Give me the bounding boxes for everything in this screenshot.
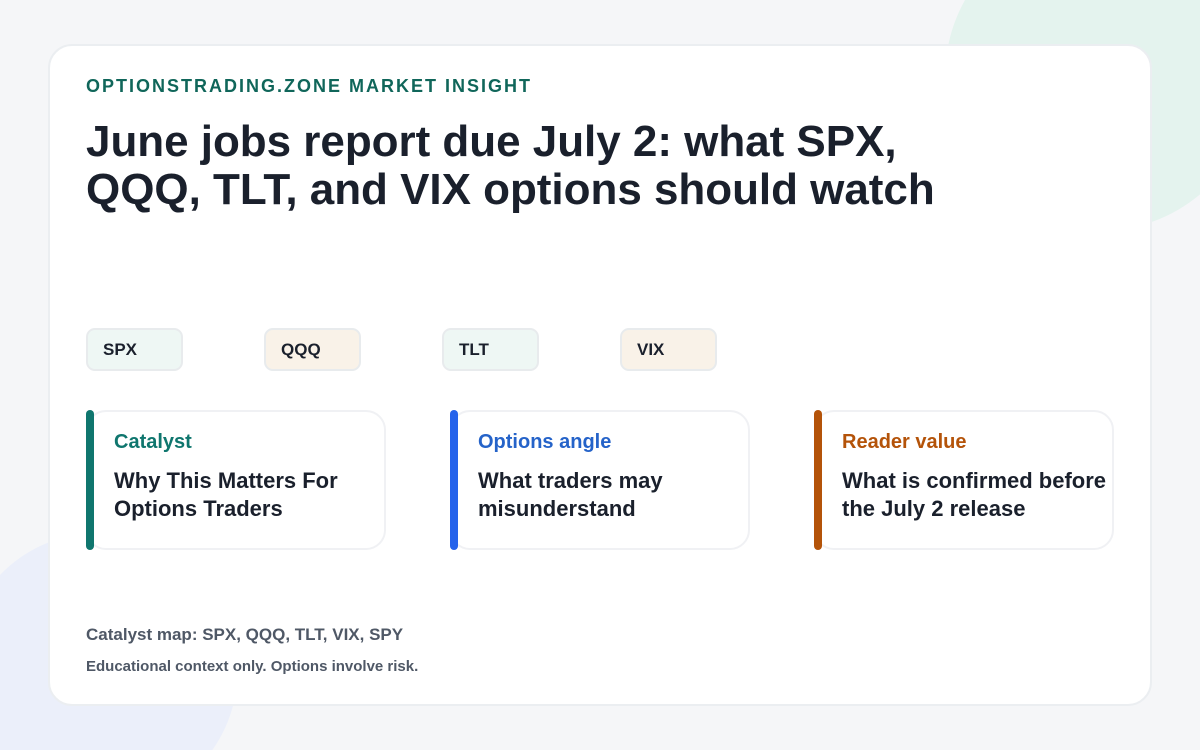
disclaimer: Educational context only. Options involve risk. xyxy=(86,658,418,675)
options angle text: misunderstand xyxy=(478,496,636,521)
accent bar: options angle xyxy=(450,410,458,550)
options angle text xyxy=(478,468,663,521)
chip: SPX: SPX xyxy=(103,340,137,359)
accent bar: reader value xyxy=(814,410,822,550)
title: QQQ, TLT, and VIX options should watch xyxy=(86,165,935,214)
chip: QQQ: QQQ xyxy=(281,340,321,359)
panel: reader value xyxy=(814,410,1114,550)
options angle text: What traders may xyxy=(478,468,663,493)
catalyst map line: Catalyst map: SPX, QQQ, TLT, VIX, SPY xyxy=(86,625,403,644)
title: June jobs report due July 2: what SPX, xyxy=(86,117,897,166)
reader value text: What is confirmed before xyxy=(842,468,1106,493)
reader value label: Reader value xyxy=(842,431,967,453)
chip: SPX xyxy=(86,328,183,371)
catalyst text xyxy=(114,468,338,521)
catalyst label: Catalyst xyxy=(114,431,192,453)
reader value text xyxy=(842,468,1106,521)
chip: VIX: VIX xyxy=(637,340,664,359)
options angle label: Options angle xyxy=(478,431,611,453)
panel: catalyst xyxy=(86,410,386,550)
eyebrow: OPTIONSTRADING.ZONE MARKET INSIGHT xyxy=(86,76,532,96)
panel: options angle xyxy=(450,410,750,550)
catalyst text: Options Traders xyxy=(114,496,283,521)
chip: TLT: TLT xyxy=(459,340,489,359)
accent bar: catalyst xyxy=(86,410,94,550)
reader value text: the July 2 release xyxy=(842,496,1025,521)
chip: VIX xyxy=(620,328,717,371)
chip: TLT xyxy=(442,328,539,371)
catalyst text: Why This Matters For xyxy=(114,468,338,493)
chip: QQQ xyxy=(264,328,361,371)
title xyxy=(86,117,935,214)
